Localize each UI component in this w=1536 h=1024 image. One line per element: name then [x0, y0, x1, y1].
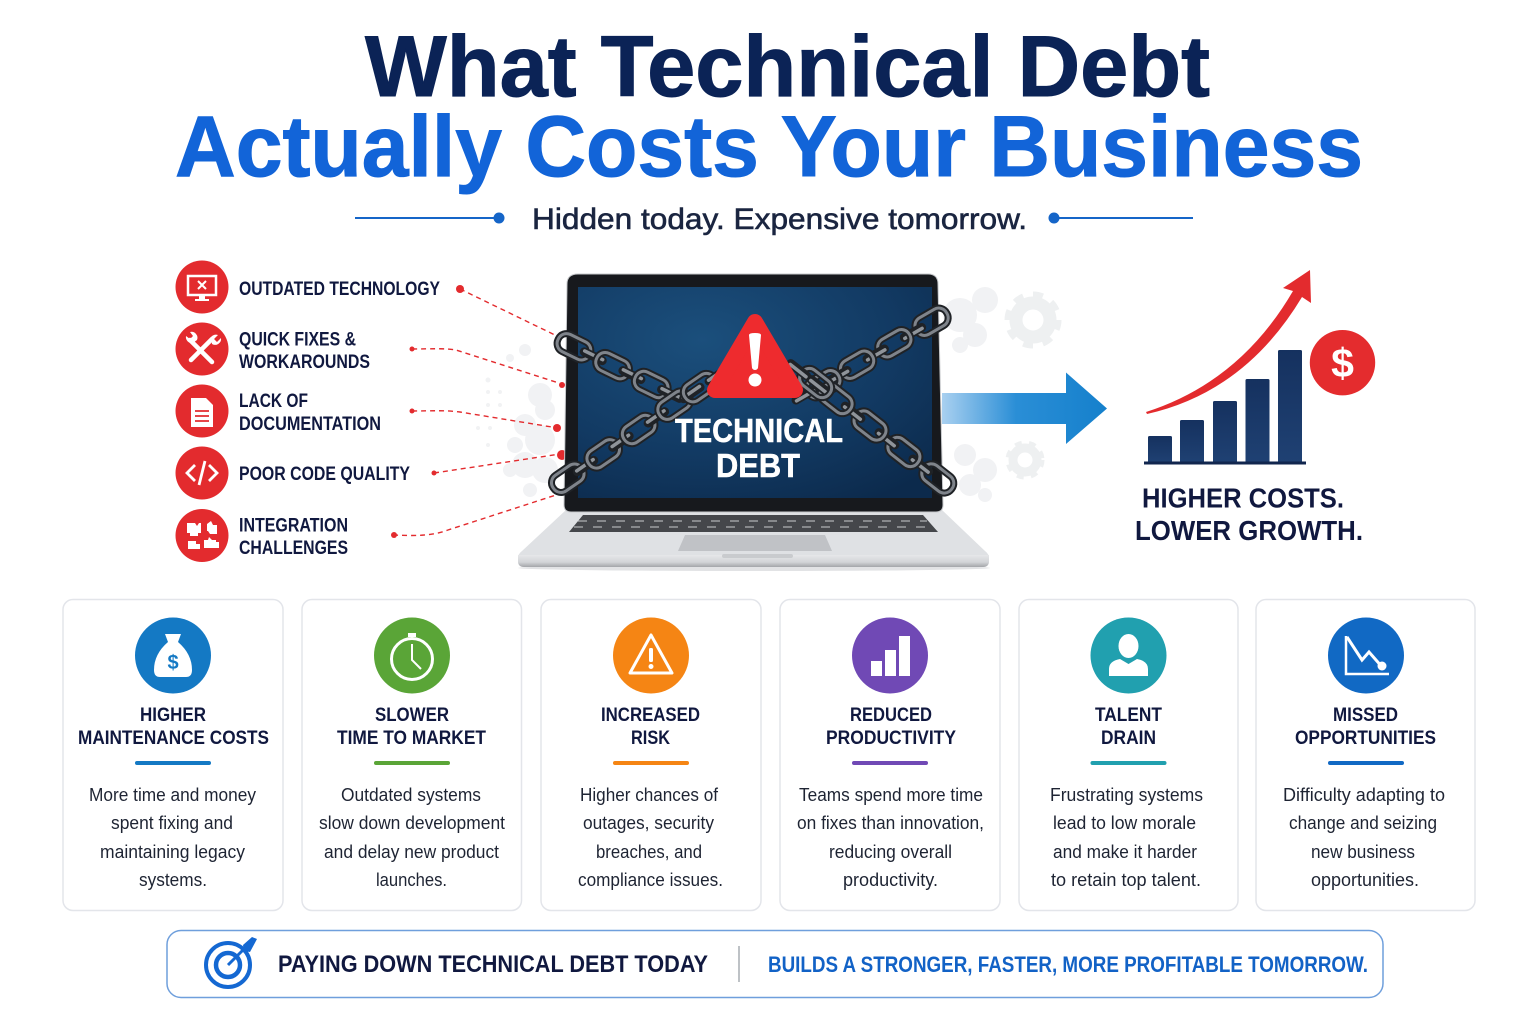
label: integration challenges: INTEGRATION [239, 516, 348, 536]
icon: dollar badge [1310, 330, 1375, 395]
laptop illustration [518, 274, 990, 571]
body text: Higher chances of [580, 785, 719, 805]
body text: Outdated systems [341, 785, 481, 805]
outcome text: LOWER GROWTH. [1135, 515, 1363, 546]
label: quick fixes [239, 330, 370, 373]
callout text left: PAYING DOWN TECHNICAL DEBT TODAY [278, 951, 708, 978]
icon: warning triangle [715, 322, 795, 390]
heading: PRODUCTIVITY [826, 728, 956, 749]
heading: RISK [631, 728, 670, 749]
screen text: TECHNICAL [675, 412, 843, 449]
bar chart: rising costs [1144, 270, 1375, 464]
body text: lead to low morale [1053, 813, 1196, 833]
heading: TIME TO MARKET [337, 728, 486, 749]
laptop screen [578, 287, 932, 498]
body text: compliance issues. [578, 870, 723, 890]
label: outdated technology: OUTDATED TECHNOLOGY [239, 279, 440, 300]
body text: productivity. [843, 870, 938, 890]
icon: falling chart [1328, 618, 1404, 694]
body text: reducing overall [829, 842, 952, 862]
body text: and make it harder [1053, 842, 1197, 862]
body text: Difficulty adapting to [1283, 785, 1445, 805]
icon: document [176, 384, 228, 438]
heading [826, 705, 956, 749]
callout text right: BUILDS A STRONGER, FASTER, MORE PROFITABLE TOMORROW. [768, 952, 1368, 977]
icon: code brackets [176, 446, 228, 500]
heading: MISSED [1333, 705, 1398, 726]
body text: on fixes than innovation, [797, 813, 984, 833]
label: lack of documentation: DOCUMENTATION [239, 414, 381, 435]
body text: More time and money [89, 785, 256, 805]
panel: increased risk [541, 600, 761, 910]
body text: launches. [376, 870, 447, 890]
heading: SLOWER [375, 705, 449, 726]
screen text: DEBT [716, 447, 800, 484]
icon: target with arrow [206, 937, 257, 987]
red growth arrow [1146, 270, 1311, 414]
heading: DRAIN [1101, 728, 1156, 749]
heading: TALENT [1095, 705, 1162, 726]
outcome text: HIGHER COSTS. [1142, 482, 1344, 514]
body text: Frustrating systems [1050, 785, 1203, 805]
label: quick fixes: QUICK FIXES & [239, 330, 356, 350]
icon: tools [176, 322, 228, 376]
icon: puzzle pieces [176, 509, 228, 562]
body text [89, 785, 256, 890]
body text: maintaining legacy [100, 842, 245, 862]
title [175, 19, 1363, 195]
heading: OPPORTUNITIES [1295, 728, 1436, 749]
subtitle with rules: Hidden today. Expensive tomorrow. [532, 203, 1027, 236]
heading [337, 705, 486, 749]
heading [1095, 705, 1162, 749]
icon: stopwatch [374, 618, 450, 694]
outcome text [1135, 482, 1363, 546]
body text: to retain top talent. [1051, 870, 1201, 890]
heading [78, 705, 269, 749]
body text: opportunities. [1311, 870, 1419, 890]
body text: systems. [139, 870, 207, 890]
label: lack of documentation: LACK OF [239, 391, 308, 412]
chains [548, 305, 957, 497]
heading [1295, 705, 1436, 749]
body text: Teams spend more time [799, 785, 983, 805]
body text: spent fixing and [111, 813, 233, 833]
panel: causes list [176, 260, 440, 562]
heading: REDUCED [850, 705, 932, 726]
icon: outdated monitor [176, 260, 228, 314]
title: What Technical Debt [365, 19, 1210, 115]
label: integration challenges [239, 516, 348, 559]
body text [578, 785, 723, 890]
subtitle with rules [355, 203, 1193, 236]
connector lines [391, 285, 567, 538]
heading: INCREASED [601, 705, 700, 726]
panel: talent drain [1019, 600, 1238, 910]
icon: dollar badge: $ [1331, 340, 1354, 386]
laptop base [518, 510, 990, 571]
panel: slower time to market [302, 600, 522, 910]
icon: money bag: $ [167, 652, 179, 674]
body text: slow down development [319, 813, 505, 833]
label: lack of documentation [239, 391, 381, 435]
label: integration challenges: CHALLENGES [239, 538, 348, 559]
screen text [675, 412, 843, 484]
background speckles and gears [476, 287, 1058, 502]
icon: money bag [135, 618, 211, 694]
label: poor code quality: POOR CODE QUALITY [239, 464, 410, 485]
heading: HIGHER [140, 705, 206, 726]
panel: reduced productivity [780, 600, 1000, 910]
body text [1050, 785, 1203, 890]
laptop lid [564, 274, 943, 512]
panel: higher maintenance costs [63, 600, 283, 910]
callout bar [167, 930, 1383, 998]
icon: person [1090, 618, 1166, 694]
panel: missed opportunities [1256, 600, 1475, 910]
body text: and delay new product [324, 842, 499, 862]
icon: bars [852, 618, 928, 694]
body text: breaches, and [596, 842, 702, 862]
body text: outages, security [583, 813, 714, 833]
heading [601, 705, 700, 749]
body text: new business [1311, 842, 1415, 862]
title: Actually Costs Your Business [175, 99, 1363, 195]
heading: MAINTENANCE COSTS [78, 728, 269, 749]
body text: change and seizing [1289, 813, 1437, 833]
body text [319, 785, 505, 890]
body text [1283, 785, 1445, 890]
arrow: blue to outcome [942, 372, 1107, 444]
label: quick fixes: WORKAROUNDS [239, 352, 370, 373]
icon: warning outline [613, 618, 689, 694]
body text [797, 785, 984, 890]
